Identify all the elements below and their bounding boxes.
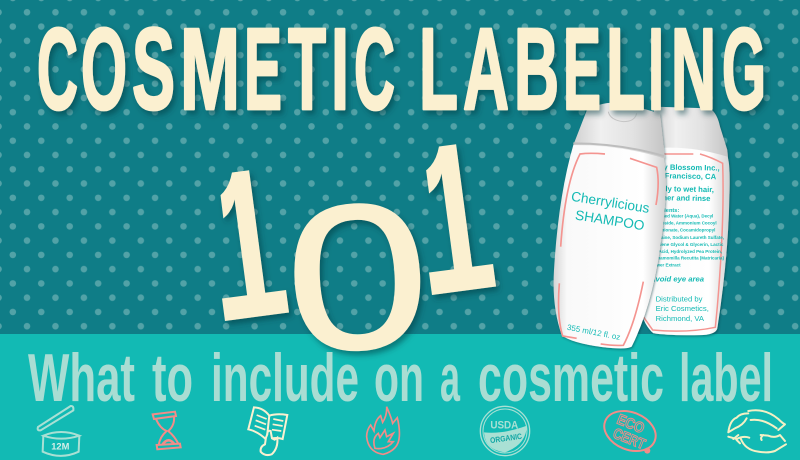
title: O [81,4,127,134]
icon: period after opening jar [38,406,79,456]
title: B [514,4,559,134]
back label text: Avoid eye area [649,274,705,283]
icon row [38,404,786,458]
title: E [563,4,601,134]
back label text: lather and rinse [653,193,711,203]
subtitle: on [374,340,424,416]
product name: Cherrylicious [570,189,651,216]
icon: flammable flame [367,407,399,454]
icon: USDA organic seal: USDA [490,419,518,431]
product name: SHAMPOO [574,207,645,233]
back shampoo bottle [627,107,730,335]
title: L [419,4,458,134]
subtitle: What [28,340,135,416]
back label text: San Francisco, CA [648,171,717,181]
back label frame [643,154,723,331]
back label text: Apply to wet hair, [650,184,714,194]
title: N [671,4,716,134]
title: L [606,4,645,134]
title: M [180,4,240,134]
bottom teal band [0,334,800,460]
back label text: Glucoside, Ammonium Cocoyl [652,220,717,225]
title: T [288,4,326,134]
back label text [642,162,724,323]
icon: Ecocert seal: ECO [614,412,646,437]
back label text: Chamomilla Recutita (Matricaria) [654,256,724,261]
big number 101 [220,144,500,359]
back label text: Propylene Glycol & Glycerin, Lactic [648,242,724,247]
back label text: Ingredients: [647,208,679,214]
front bottle cap [573,103,665,158]
back label text: Richmond, VA [656,314,705,323]
big number 101: 1 [398,103,510,362]
title: I [331,4,349,134]
back label text: Acid, Hydrolyzed Pea Protein, [658,249,722,254]
back bottle body [627,148,730,335]
icon: Ecocert seal [598,404,662,458]
volume text: 355 ml/12 fl. oz [566,323,621,342]
subtitle: cosmetic [478,340,664,416]
back label text: Isethionate, Cocamidopropyl [654,227,715,232]
subtitle: to [152,340,193,416]
back label text: Flower Extract [650,263,681,268]
icon: period after opening jar: 12M [51,441,70,451]
icon: book with pointing hand [248,407,287,455]
cap highlight [608,112,637,122]
back label text: Betaine, Sodium Laureth Sulfate, [654,235,724,240]
back label text: Cherry Blossom Inc., [643,162,720,173]
title: C [354,4,395,134]
icon: Ecocert seal: CERT [610,426,647,453]
title: E [244,4,282,134]
title: S [132,4,175,134]
back bottle cap [653,107,729,165]
front shampoo bottle [554,103,666,348]
back label text: Eric Cosmetics, [656,304,709,313]
subtitle: include [211,340,359,416]
title: A [463,4,509,134]
icon: USDA organic seal [480,406,530,456]
title: I [648,4,664,134]
front label frame [559,153,658,345]
title [37,4,766,134]
icon: hourglass [153,412,181,449]
subtitle [28,340,773,416]
title: C [37,4,78,134]
subtitle: a [440,340,461,416]
icon: USDA organic seal: ORGANIC [490,432,523,445]
back label text: Distributed by [656,294,703,303]
shoulder shade [573,143,664,156]
big number 101: 1 [191,129,303,388]
product name [566,189,651,342]
background with polka dots [0,0,800,334]
back label text: Purified Water (Aqua), Decyl [653,213,713,218]
icon: leaping bunnies [728,410,786,452]
front bottle body [554,145,666,348]
big number 101: 0 [280,159,435,396]
